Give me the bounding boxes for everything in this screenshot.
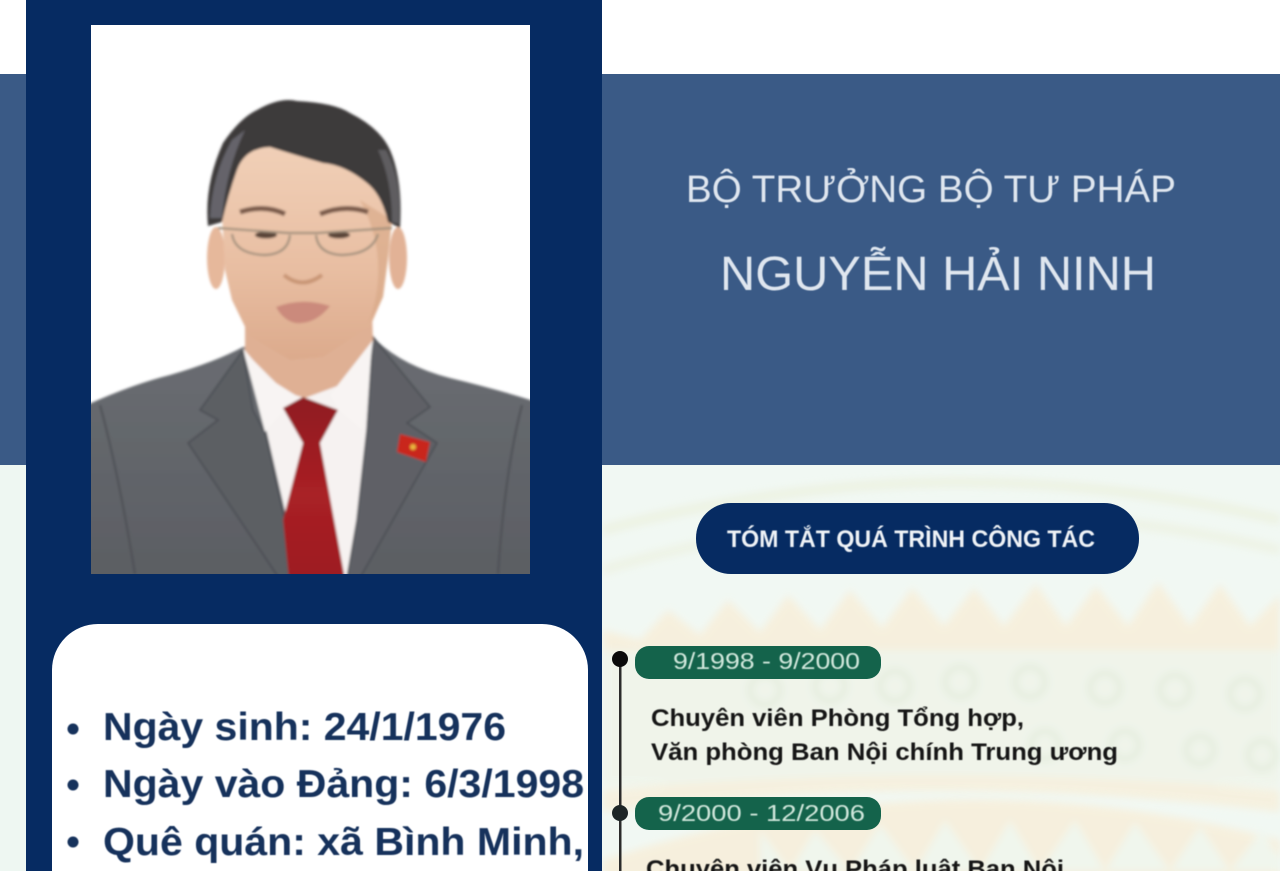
- eyes: [255, 232, 277, 238]
- glasses: [218, 228, 392, 255]
- right lapel: [345, 337, 437, 590]
- neck: [245, 310, 373, 398]
- face shadow: [361, 202, 392, 310]
- face: [220, 145, 392, 326]
- section heading pill: TÓM TẮT QUÁ TRÌNH CÔNG TÁC: [727, 525, 1095, 553]
- timeline entry 1: 9/1998 - 9/2000: [673, 648, 860, 674]
- jacket: [91, 342, 530, 574]
- personal details list: Ngày sinh: 24/1/1976: [103, 706, 506, 749]
- title: [686, 167, 1176, 301]
- personal details list: Quê quán: xã Bình Minh,: [103, 821, 584, 864]
- panel: patterned timeline background: [602, 465, 1280, 871]
- personal details list: Ngày vào Đảng: 6/3/1998: [103, 763, 584, 806]
- ears: [207, 227, 225, 289]
- timeline entry 1: [635, 646, 1118, 766]
- sleeve seams: [100, 405, 522, 574]
- section heading pill: [696, 503, 1139, 574]
- shirt: [244, 354, 372, 574]
- party pin: [397, 434, 430, 462]
- personal details list: [68, 706, 584, 864]
- info card: [52, 624, 588, 871]
- brows: [240, 208, 285, 214]
- title: BỘ TRƯỞNG BỘ TƯ PHÁP: [686, 167, 1176, 211]
- title: NGUYỄN HẢI NINH: [720, 246, 1156, 301]
- hair: [207, 100, 401, 228]
- timeline entry 2: [635, 797, 1064, 871]
- left margin strip below the banner: [0, 465, 26, 871]
- navy left column: [26, 0, 602, 871]
- timeline entry 1: Văn phòng Ban Nội chính Trung ương: [651, 739, 1118, 766]
- timeline entry 2: 9/2000 - 12/2006: [658, 800, 865, 826]
- timeline entry 1: Chuyên viên Phòng Tổng hợp,: [651, 705, 1024, 732]
- tie: [283, 397, 347, 590]
- left lapel: [188, 349, 285, 574]
- portrait photo: [80, 25, 540, 590]
- timeline axis: [612, 651, 628, 871]
- banner band: [0, 74, 1280, 465]
- nose: [284, 275, 322, 282]
- mouth: [276, 302, 330, 323]
